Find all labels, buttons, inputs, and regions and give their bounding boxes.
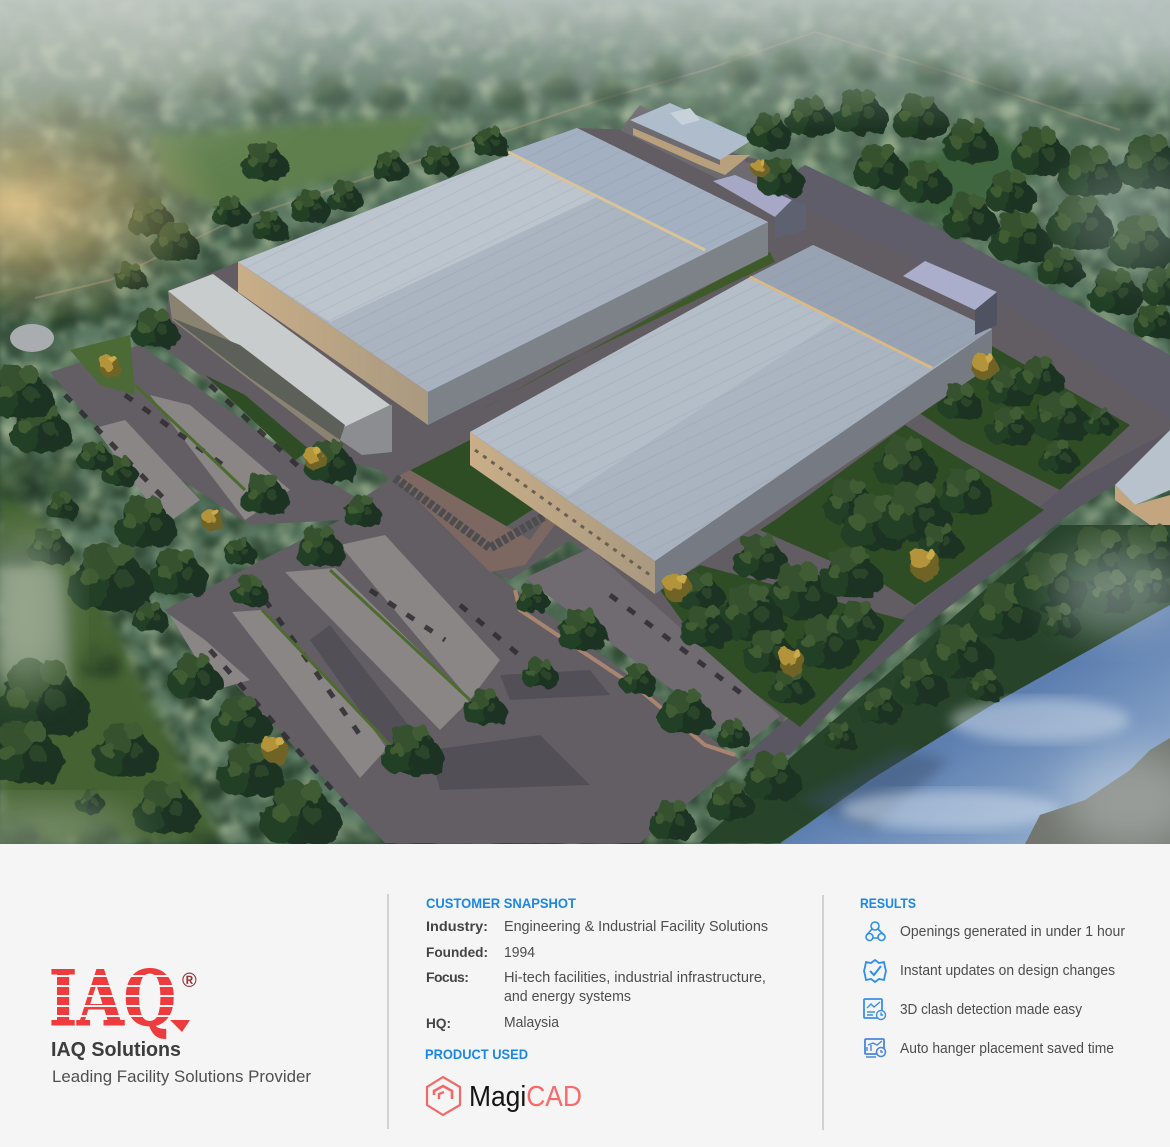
heading: results: RESULTS	[860, 895, 916, 911]
trees	[0, 89, 1170, 845]
central parking trees	[381, 584, 802, 839]
company name: IAQ Solutions	[51, 1039, 181, 1061]
gatehouse and small service buildings	[630, 103, 997, 335]
IAQ logo: ®	[182, 970, 197, 992]
row: founded: 1994	[504, 945, 535, 961]
parked cars	[65, 385, 750, 810]
IAQ logo: IAQ	[49, 954, 176, 1043]
result 4: Auto hanger placement saved time	[900, 1041, 1114, 1057]
paved site and roads	[160, 128, 1170, 722]
result 3: 3D clash detection made easy	[900, 1002, 1083, 1018]
heading: product used: PRODUCT USED	[425, 1046, 528, 1062]
riverbank greenery	[700, 525, 1170, 843]
company tagline: Leading Facility Solutions Provider	[52, 1067, 311, 1086]
upper left forest trees	[114, 126, 509, 289]
shadow bands on asphalt	[310, 625, 610, 790]
riverbank trees	[824, 525, 1170, 749]
aerial photo of the facility	[0, 0, 1170, 856]
front office annex	[168, 274, 392, 455]
row: focus: and energy systems	[504, 989, 631, 1005]
column dividers	[388, 894, 823, 1130]
panel: company brand	[46, 954, 311, 1086]
distant forest texture	[0, 0, 1170, 844]
panel: customer snapshot	[425, 895, 768, 1115]
row: focus: Hi-tech facilities, industrial infrastructure,	[504, 970, 766, 986]
footer panel	[0, 844, 1170, 1147]
forest canopy highlights	[0, 0, 1170, 844]
lawns	[70, 252, 1130, 727]
left side landscape trees	[0, 309, 382, 845]
result 3	[864, 999, 1083, 1020]
panel: results	[860, 895, 1125, 1057]
main building south	[470, 245, 992, 594]
row: headquarters	[426, 1015, 560, 1031]
courtyard trees	[677, 357, 1117, 704]
icon: report with clock	[864, 999, 886, 1020]
storage tank	[10, 324, 54, 352]
green fields	[0, 115, 1040, 844]
row: headquarters: HQ:	[426, 1015, 451, 1031]
row: industry: Engineering & Industrial Facility Solutions	[504, 919, 768, 935]
distant blurred trees	[0, 46, 1153, 856]
row: industry: Industry:	[426, 918, 488, 934]
river	[780, 605, 1170, 844]
mist and sunlight	[0, 0, 1170, 855]
east edge building	[1115, 430, 1170, 525]
curved terracotta kerb	[515, 590, 735, 755]
MagiCAD logo: MagiCAD	[469, 1081, 582, 1113]
green strips between parking rows	[135, 385, 470, 745]
heading: customer snapshot: CUSTOMER SNAPSHOT	[426, 895, 576, 911]
icon: check badge	[864, 960, 886, 982]
main building north	[238, 128, 768, 425]
result 2	[864, 960, 1115, 982]
covered walkway	[395, 470, 562, 572]
autumn trees	[99, 159, 998, 763]
row: headquarters: Malaysia	[504, 1015, 560, 1031]
row: founded	[426, 944, 535, 961]
upper right forest trees	[748, 89, 1170, 339]
result 2: Instant updates on design changes	[900, 963, 1115, 979]
row: founded: Founded:	[426, 944, 488, 960]
row: focus	[426, 969, 766, 1005]
icon: connected circles	[866, 922, 885, 940]
row: focus: Focus:	[426, 969, 468, 985]
parking islands	[95, 395, 780, 778]
result 1: Openings generated in under 1 hour	[900, 924, 1125, 940]
icon: monitor chart with clock	[865, 1039, 886, 1057]
perimeter path	[35, 32, 1120, 298]
MagiCAD logo	[427, 1077, 582, 1115]
